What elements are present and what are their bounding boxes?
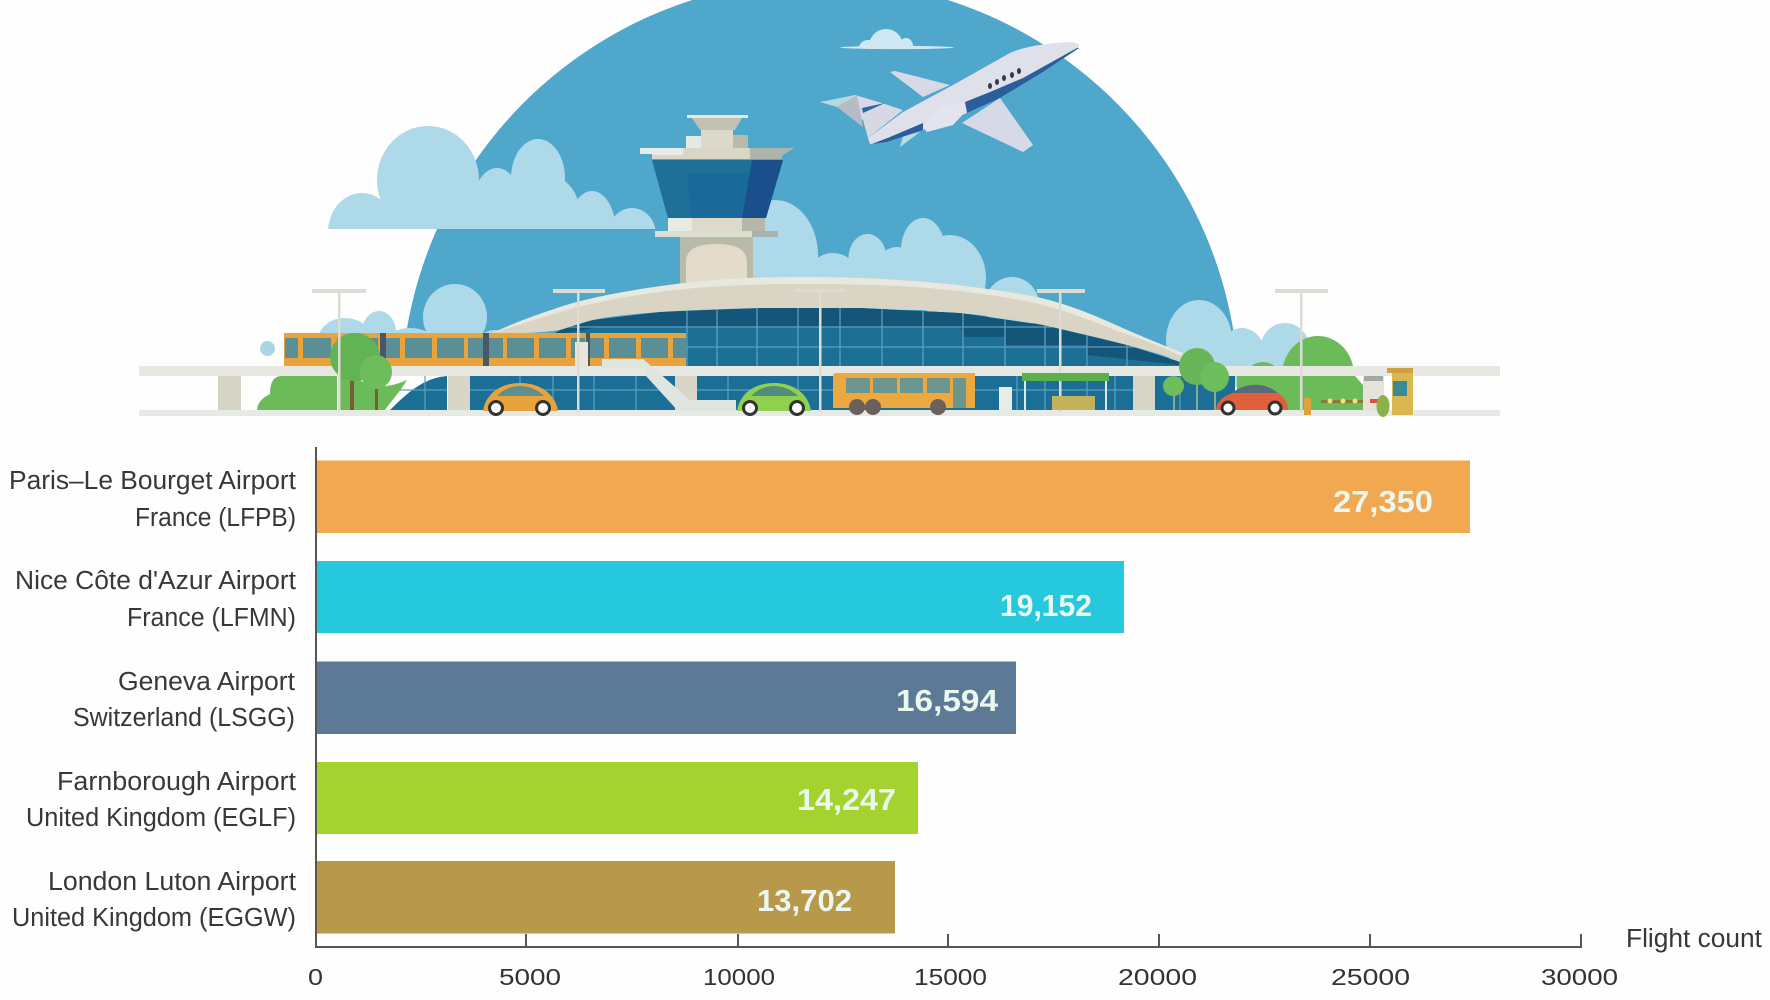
label: Nice: Nice Côte d'Azur Airport <box>15 567 296 595</box>
red car <box>1216 385 1288 414</box>
bar chart <box>308 447 1762 990</box>
label: Farnborough <box>26 768 296 832</box>
axis tick labels: 20000 <box>1118 964 1197 990</box>
engine <box>923 102 967 132</box>
axis tick labels: 10000 <box>703 964 775 990</box>
label: Paris-Le Bourget: France (LFPB) <box>135 504 296 532</box>
small round bush <box>260 341 275 356</box>
axis tick labels: 15000 <box>914 964 987 990</box>
belly stripe <box>965 48 1079 113</box>
axes <box>316 447 1582 947</box>
elevated road <box>139 366 1500 376</box>
axis tick labels: 25000 <box>1331 964 1410 990</box>
airport labels <box>9 467 296 932</box>
right green hedges <box>1237 336 1363 414</box>
grey fin <box>837 95 863 127</box>
guard booth <box>1387 368 1413 415</box>
low clouds on the left <box>318 284 509 362</box>
gate with barrier <box>1304 376 1390 417</box>
ticket kiosk <box>999 387 1012 410</box>
value: 16,594: 16,594 <box>896 683 999 718</box>
lower glass level <box>390 376 1235 410</box>
near wing <box>962 98 1033 152</box>
axis title: Flight count <box>1626 925 1762 953</box>
far wing <box>890 71 950 97</box>
value: 19,152: 19,152 <box>1000 588 1092 623</box>
tail body <box>837 95 903 138</box>
bus shelter <box>1022 373 1109 410</box>
label: Nice <box>15 567 296 632</box>
bar: Geneva <box>317 662 1016 734</box>
label: Paris-Le Bourget <box>9 467 296 532</box>
info kiosk upper <box>575 342 588 367</box>
large left cloud <box>328 126 656 229</box>
bar: Paris-Le Bourget <box>317 460 1470 533</box>
label: Farnborough: Farnborough Airport <box>57 768 296 796</box>
label: London Luton <box>12 868 296 932</box>
left trees <box>330 333 392 410</box>
lamp posts <box>312 289 1328 412</box>
label: London Luton: United Kingdom (EGGW) <box>12 904 296 932</box>
yellow bus <box>833 373 975 415</box>
right trees <box>1163 348 1229 410</box>
green car <box>737 383 811 414</box>
control tower <box>640 115 794 285</box>
terminal roof <box>493 277 1183 362</box>
left pillar <box>218 376 241 410</box>
small cloud at the top <box>840 29 954 50</box>
bar: Farnborough <box>317 762 918 834</box>
label: Farnborough: United Kingdom (EGLF) <box>26 804 296 832</box>
clouds behind the terminal <box>732 200 1039 333</box>
value: 27,350: 27,350 <box>1333 484 1433 519</box>
axis tick labels: 5000 <box>499 964 561 990</box>
fuselage <box>868 42 1079 144</box>
label: Geneva <box>73 668 295 732</box>
windows <box>988 68 1021 89</box>
label: Paris-Le Bourget: Paris–Le Bourget Airport <box>9 467 296 495</box>
value: 14,247: 14,247 <box>797 782 896 817</box>
bar: London Luton <box>317 861 895 934</box>
label: London Luton: London Luton Airport <box>48 868 296 896</box>
value: 13,702: 13,702 <box>757 883 852 918</box>
ventral fin <box>900 132 920 147</box>
roof highlight <box>493 277 1183 356</box>
light tail tip <box>820 95 855 107</box>
axis tick labels: 30000 <box>1541 964 1618 990</box>
airport illustration <box>139 0 1500 417</box>
label: Geneva: Geneva Airport <box>118 668 295 696</box>
left green hedges <box>257 376 407 410</box>
business jet <box>820 42 1079 152</box>
label: Geneva: Switzerland (LSGG) <box>73 704 295 732</box>
taxi <box>483 383 558 414</box>
terminal glass facade <box>555 308 1180 366</box>
ground <box>139 410 1500 416</box>
bar: Nice Cote d'Azur <box>317 561 1124 633</box>
rear stripe <box>872 123 923 144</box>
low clouds on the right <box>1166 300 1310 388</box>
axis tick labels: 0 <box>308 964 323 990</box>
elevated train <box>284 333 686 367</box>
stairway to upper level <box>602 359 736 411</box>
sky dome <box>407 0 1234 359</box>
tail stripe <box>862 103 885 113</box>
axis tick labels <box>308 964 1618 990</box>
label: Nice: France (LFMN) <box>127 604 296 632</box>
